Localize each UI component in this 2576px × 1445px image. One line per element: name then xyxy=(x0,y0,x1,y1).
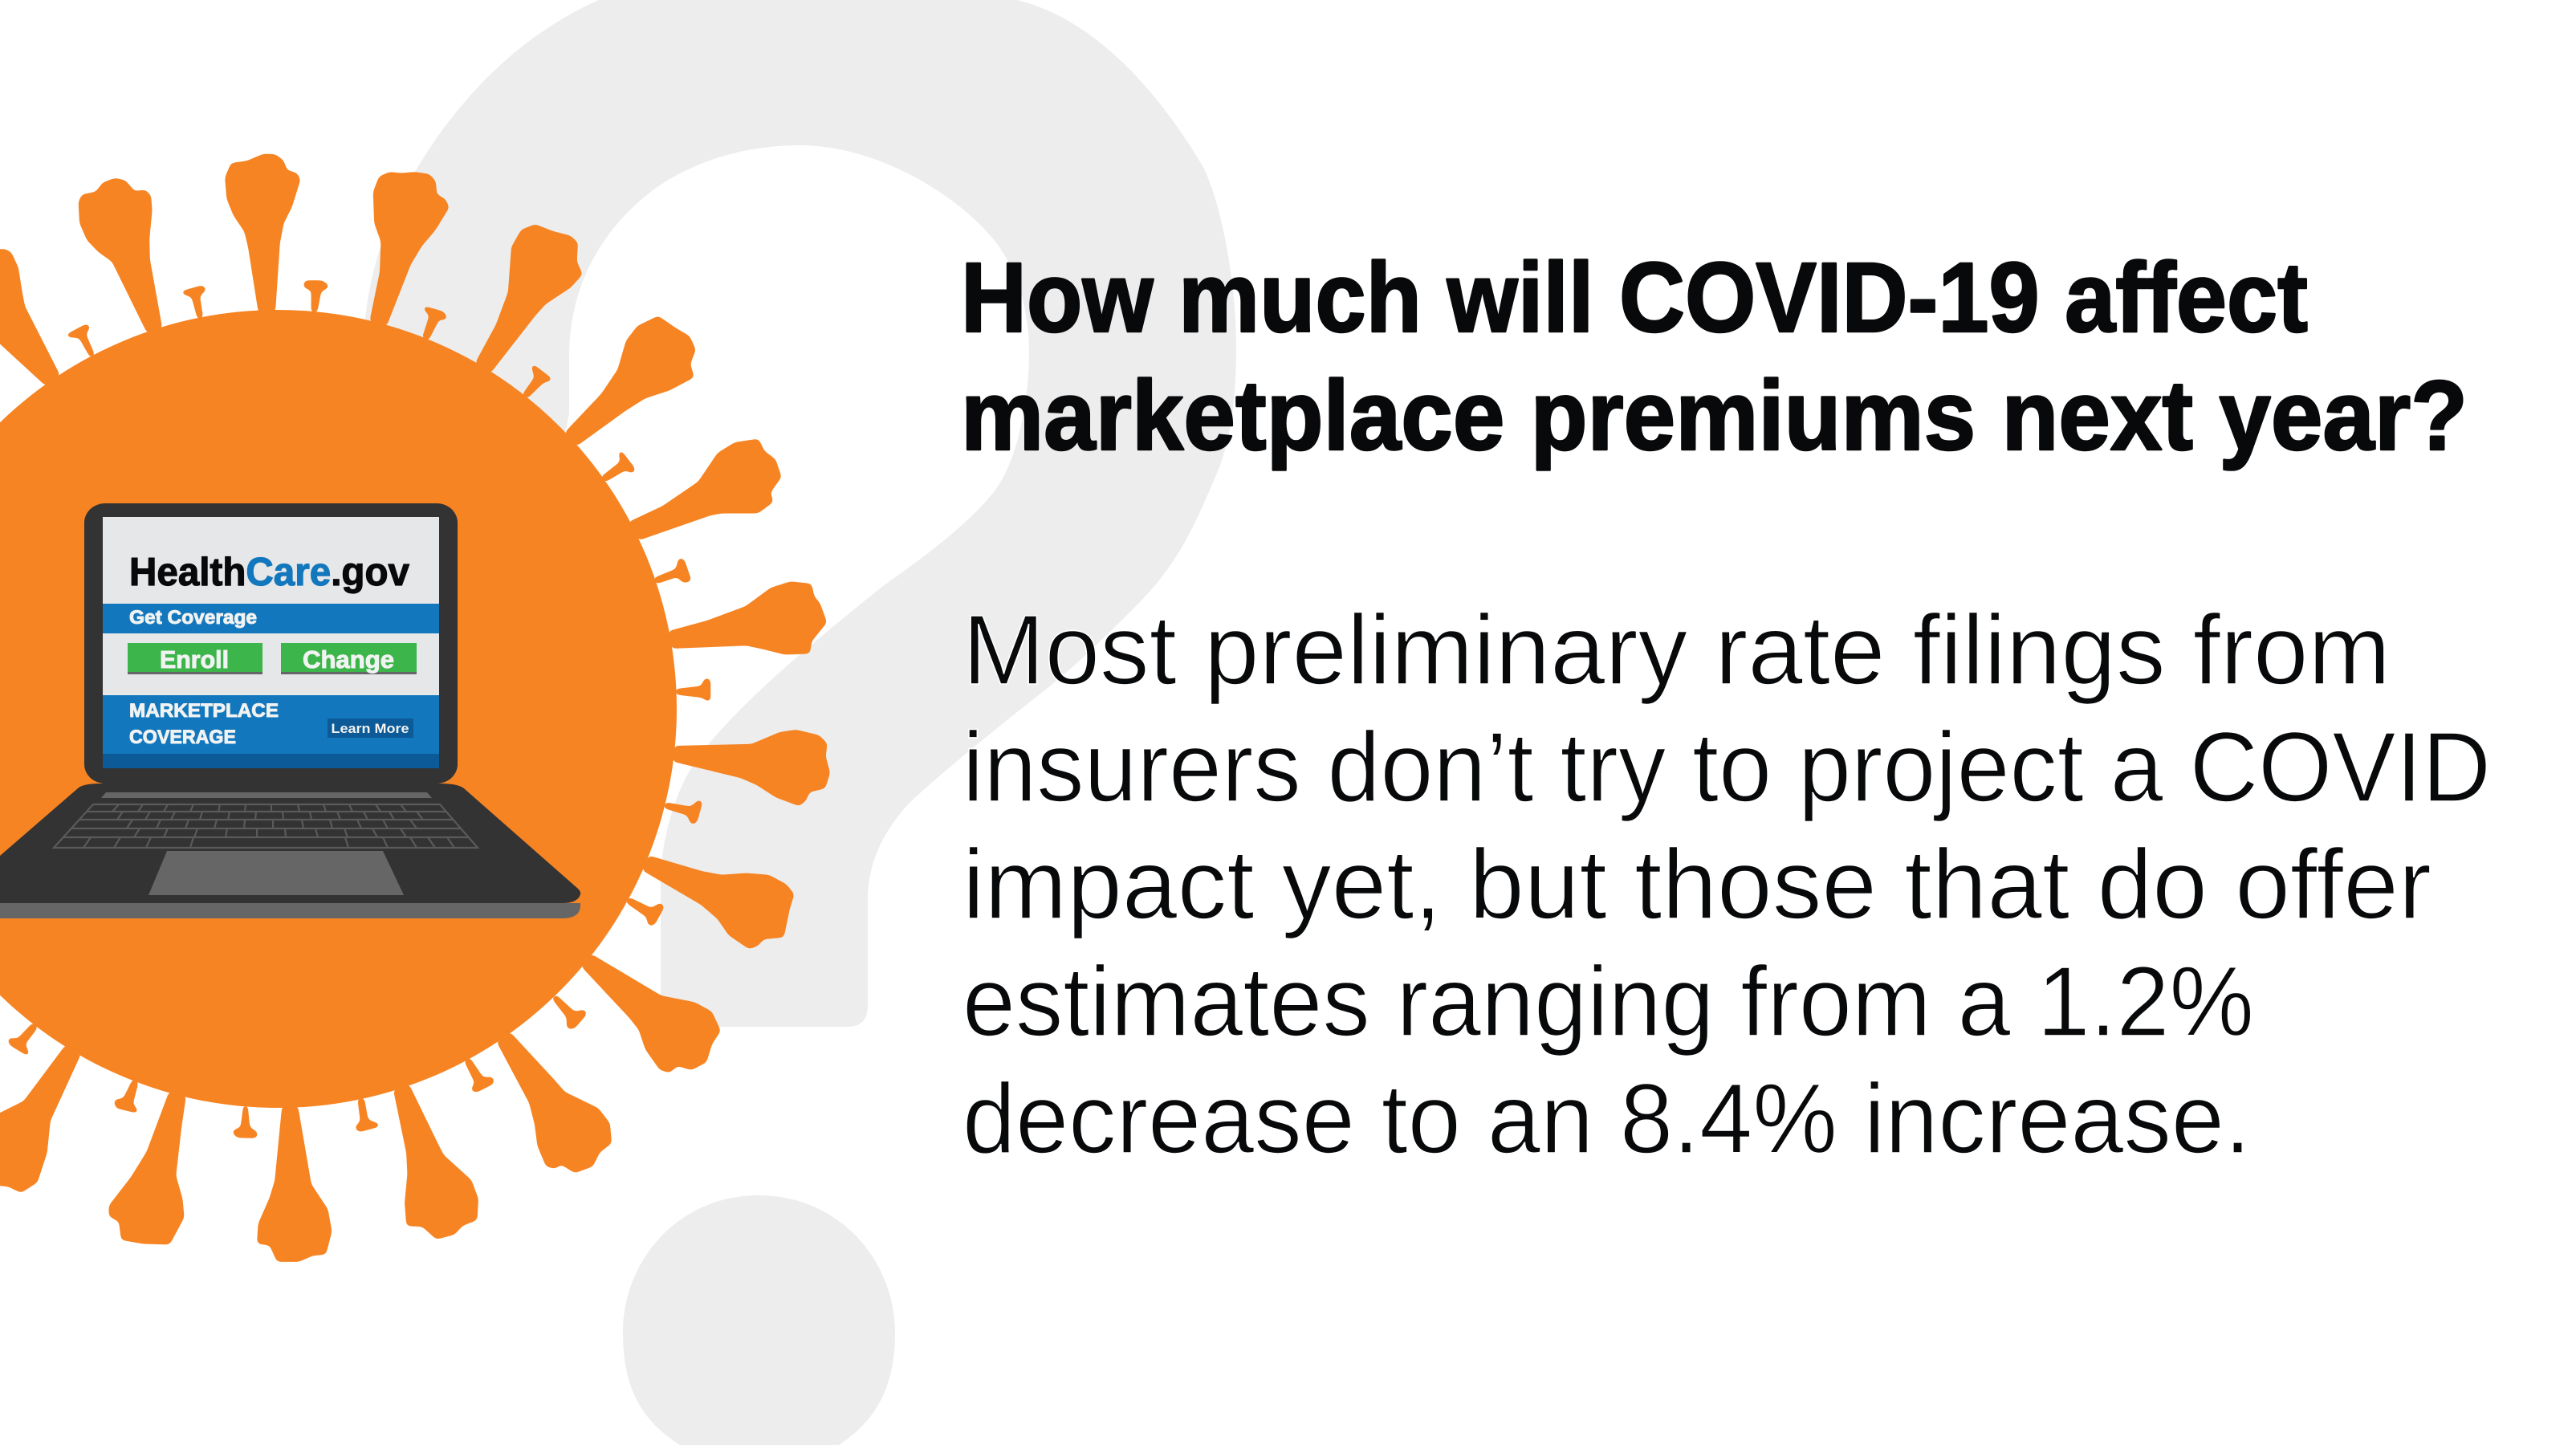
change button: Change xyxy=(303,645,394,674)
heading xyxy=(961,243,2468,471)
body text: insurers don’t try to project a COVID xyxy=(962,713,2491,823)
learn more button: Learn More xyxy=(331,721,409,736)
heading: How much will COVID-19 affect xyxy=(961,243,2308,353)
laptop illustration xyxy=(0,503,580,918)
virus body circle xyxy=(0,310,677,1108)
logo text: HealthCare.gov xyxy=(129,551,410,594)
keyboard xyxy=(54,804,478,848)
body text: impact yet, but those that do offer xyxy=(962,830,2432,940)
body text xyxy=(962,596,2491,1174)
laptop lid xyxy=(84,503,458,784)
change button xyxy=(281,643,417,674)
marketplace coverage panel xyxy=(103,695,439,768)
body text: decrease to an 8.4% increase. xyxy=(962,1064,2251,1174)
enroll button xyxy=(128,643,262,674)
marketplace coverage panel: MARKETPLACE xyxy=(129,700,279,722)
laptop base xyxy=(0,784,580,918)
body text: Most preliminary rate filings from xyxy=(962,596,2391,706)
body text: estimates ranging from a 1.2% xyxy=(962,947,2254,1057)
get coverage bar: Get Coverage xyxy=(129,607,257,629)
get coverage bar xyxy=(103,604,439,633)
heading: marketplace premiums next year? xyxy=(961,361,2468,471)
learn more button xyxy=(328,718,413,738)
enroll button: Enroll xyxy=(160,645,229,674)
lower virus spikes xyxy=(0,731,828,1260)
virus spikes xyxy=(0,156,828,1260)
virus illustration xyxy=(0,156,828,1260)
screen: HealthCare.gov page xyxy=(103,517,439,768)
marketplace coverage panel: COVERAGE xyxy=(129,727,236,748)
background question mark xyxy=(365,0,1236,1445)
upper virus spikes xyxy=(0,156,825,700)
